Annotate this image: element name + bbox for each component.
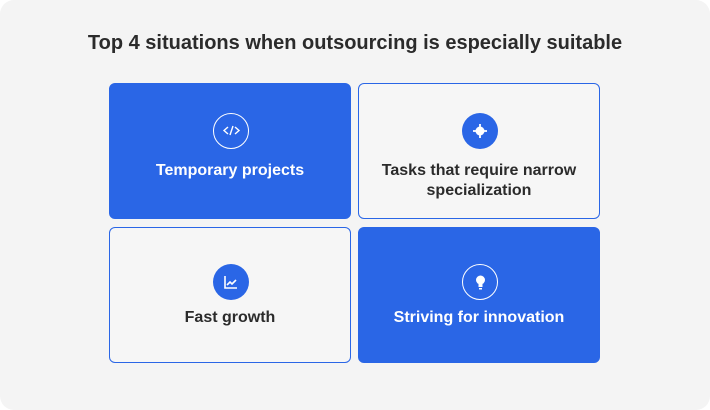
card: fast growth — [109, 227, 351, 363]
icon: target — [462, 113, 498, 149]
text: Fast growth — [185, 309, 275, 326]
icon: chart — [213, 264, 249, 300]
card: innovation — [358, 227, 600, 363]
icon: bulb — [462, 264, 498, 300]
title: Top 4 situations when outsourcing is especially suitable — [88, 32, 622, 54]
text: Temporary projects — [156, 162, 304, 179]
text: Striving for innovation — [394, 309, 564, 326]
card: temporary projects — [109, 83, 351, 219]
icon: code — [213, 113, 249, 149]
text: specialization — [427, 182, 531, 199]
card: narrow specialization — [358, 83, 600, 219]
text — [382, 162, 576, 199]
text: Tasks that require narrow — [382, 162, 576, 179]
